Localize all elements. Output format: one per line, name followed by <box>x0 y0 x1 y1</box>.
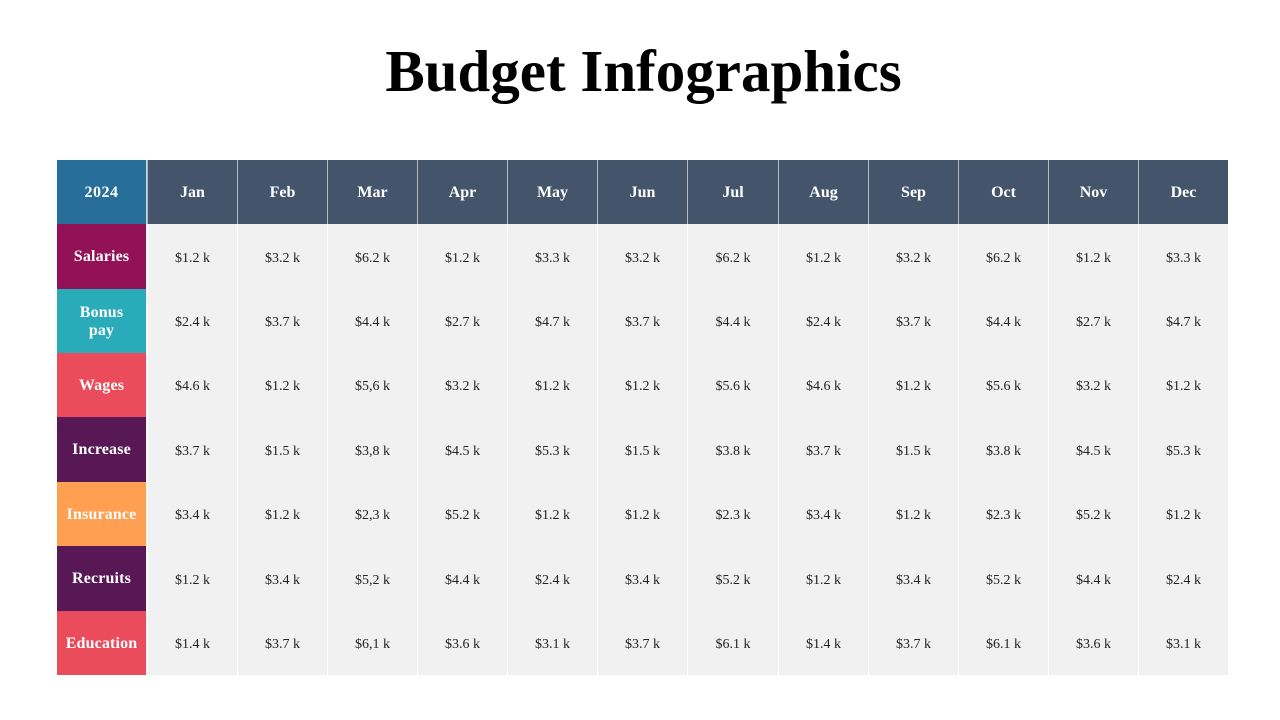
header row: months: Jun <box>630 184 655 200</box>
header row: months: Sep <box>901 184 926 200</box>
row: Education: $1.4 k <box>806 637 841 652</box>
row: Recruits: $3.4 k <box>896 572 931 588</box>
row: Recruits: $4.4 k <box>1076 572 1111 588</box>
row: Education: $3.7 k <box>896 637 931 652</box>
row: Recruits: $4.4 k <box>445 572 480 588</box>
row: Education <box>57 611 1201 675</box>
row: Wages: $1.2 k <box>625 379 660 394</box>
row: Bonus pay: $4.4 k <box>355 315 390 330</box>
row: Increase <box>57 417 1201 482</box>
row: Bonus pay: $2.7 k <box>445 315 480 330</box>
row: Salaries <box>57 224 1201 289</box>
row: Salaries: $3.2 k <box>625 250 660 266</box>
row: Bonus pay: $3.7 k <box>896 315 931 330</box>
row: Bonus pay: $2.4 k <box>175 315 210 330</box>
header row: months: Aug <box>809 184 838 200</box>
label: Insurance <box>57 482 147 546</box>
row: Insurance: $3.4 k <box>175 508 210 523</box>
row: Wages: $1.2 k <box>896 379 931 394</box>
row: Insurance: $2,3 k <box>355 508 390 523</box>
row: Increase: $1.5 k <box>265 444 300 458</box>
label: Bonus pay <box>57 289 147 353</box>
label: Recruits <box>57 546 147 611</box>
row: Insurance: $1.2 k <box>265 508 300 523</box>
row: Recruits: $3.4 k <box>625 572 660 588</box>
row: Bonus pay: $4.7 k <box>535 315 570 330</box>
row: Recruits <box>57 546 1201 611</box>
row: Education: $3.6 k <box>445 637 480 652</box>
label: Salaries <box>57 224 147 289</box>
row: Salaries: $3.3 k <box>535 250 570 266</box>
row: Education: $6.1 k <box>716 637 750 652</box>
label: Education <box>57 611 147 675</box>
year cell <box>57 160 147 224</box>
row: Wages: $1.2 k <box>1166 379 1201 394</box>
row: Insurance: $1.2 k <box>1166 508 1201 523</box>
row: Increase: $4.5 k <box>1076 444 1111 458</box>
row: Wages: $1.2 k <box>265 379 300 394</box>
label: Wages: Wages <box>79 376 124 394</box>
label: Recruits: Recruits <box>72 570 131 587</box>
row: Education: $3.7 k <box>265 637 300 652</box>
header row: months: Mar <box>357 184 388 200</box>
label: Increase <box>57 417 147 482</box>
row: Insurance <box>57 482 1201 546</box>
label: Increase: Increase <box>72 441 131 458</box>
row: Bonus pay: $2.7 k <box>1076 315 1111 330</box>
row: Bonus pay <box>57 289 1201 353</box>
row: Recruits: $5,2 k <box>355 572 390 588</box>
row: Recruits: $3.4 k <box>265 572 300 588</box>
row: Wages: $5.6 k <box>716 379 750 394</box>
header row: months: Apr <box>449 184 476 200</box>
row: Increase: $4.5 k <box>445 444 480 458</box>
budget table <box>57 160 1228 675</box>
header row: months <box>57 160 1228 224</box>
row: Bonus pay: $4.7 k <box>1166 315 1201 330</box>
label: Bonus pay: pay <box>89 322 114 338</box>
row: Increase: $1.5 k <box>625 444 660 458</box>
row: Bonus pay: $3.7 k <box>265 315 300 330</box>
row: Education: $6,1 k <box>355 637 390 652</box>
row: Insurance: $1.2 k <box>896 508 931 523</box>
row: Increase: $5.3 k <box>1166 444 1201 458</box>
row: Insurance: $2.3 k <box>986 508 1021 523</box>
row: Increase: $5.3 k <box>535 444 570 458</box>
row: Increase: $3,8 k <box>355 444 390 458</box>
header row: months: May <box>537 184 568 200</box>
header row: months: Jul <box>722 184 744 200</box>
row: Recruits: $5.2 k <box>986 572 1021 588</box>
row: Wages: $5.6 k <box>986 379 1021 394</box>
row: Insurance: $3.4 k <box>806 508 841 523</box>
row: Bonus pay: $4.4 k <box>716 315 750 330</box>
row: Wages: $3.2 k <box>445 379 480 394</box>
row: Salaries: $1.2 k <box>1076 250 1111 266</box>
row: Salaries: $1.2 k <box>806 250 841 266</box>
row: Education: $3.1 k <box>535 637 570 652</box>
row: Education: $3.6 k <box>1076 637 1111 652</box>
row: Bonus pay: $4.4 k <box>986 315 1021 330</box>
row: Increase: $3.8 k <box>716 444 750 458</box>
header row: months: Oct <box>991 184 1016 200</box>
row: Increase: $1.5 k <box>896 444 931 458</box>
row: Insurance: $5.2 k <box>1076 508 1111 523</box>
header row: months: Jan <box>180 184 205 200</box>
row: Salaries: $1.2 k <box>445 250 480 266</box>
row: Education: $3.7 k <box>625 637 660 652</box>
row: Salaries: $3.3 k <box>1166 250 1201 266</box>
row: Insurance: $1.2 k <box>535 508 570 523</box>
row: Recruits: $5.2 k <box>716 572 750 588</box>
label: Wages <box>57 353 147 417</box>
row: Salaries: $6.2 k <box>986 250 1021 266</box>
row: Recruits: $2.4 k <box>1166 572 1201 588</box>
row: Insurance: $2.3 k <box>716 508 750 523</box>
row: Increase: $3.8 k <box>986 444 1021 458</box>
row: Salaries: $6.2 k <box>716 250 750 266</box>
row: Recruits: $1.2 k <box>175 572 210 588</box>
row: Recruits: $1.2 k <box>806 572 841 588</box>
row: Bonus pay: $3.7 k <box>625 315 660 330</box>
row: Education: $1.4 k <box>175 637 210 652</box>
row: Wages: $1.2 k <box>535 379 570 394</box>
row: Wages: $4.6 k <box>806 379 841 394</box>
row: Education: $3.1 k <box>1166 637 1201 652</box>
year cell: 2024 <box>84 184 118 200</box>
label: Education: Education <box>66 634 137 652</box>
header row: months: Nov <box>1080 184 1107 200</box>
row: Wages <box>57 353 1201 417</box>
label: Salaries: Salaries <box>74 248 129 265</box>
row: Wages: $4.6 k <box>175 379 210 394</box>
row: Salaries: $3.2 k <box>265 250 300 266</box>
label: Bonus pay: Bonus <box>80 304 123 320</box>
row: Wages: $5,6 k <box>355 379 390 394</box>
header row: months: Dec <box>1171 184 1196 200</box>
row: Salaries: $3.2 k <box>896 250 931 266</box>
label: Insurance: Insurance <box>67 506 136 522</box>
row: Recruits: $2.4 k <box>535 572 570 588</box>
row: Increase: $3.7 k <box>806 444 841 458</box>
row: Insurance: $1.2 k <box>625 508 660 523</box>
row: Education: $6.1 k <box>986 637 1021 652</box>
row: Salaries: $1.2 k <box>175 250 210 266</box>
row: Salaries: $6.2 k <box>355 250 390 266</box>
row: Wages: $3.2 k <box>1076 379 1111 394</box>
row: Insurance: $5.2 k <box>445 508 480 523</box>
header row: months: Feb <box>270 184 295 200</box>
row: Bonus pay: $2.4 k <box>806 315 841 330</box>
title: Budget Infographics <box>385 38 902 104</box>
row: Increase: $3.7 k <box>175 444 210 458</box>
